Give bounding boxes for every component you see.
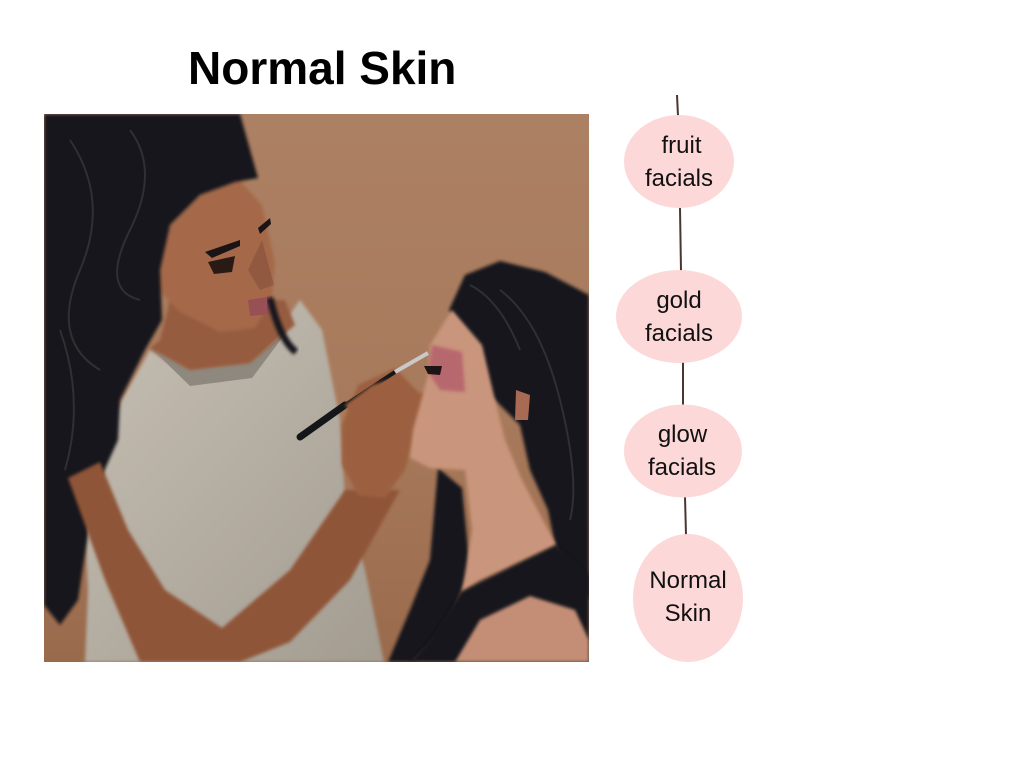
artist hair [44,114,296,625]
node: gold facials: facials [645,320,713,347]
node: Normal Skin [633,534,743,662]
makeup brush [300,353,428,437]
artist hand [340,368,424,497]
node: Normal Skin: Skin [665,600,711,627]
node: glow facials [624,404,742,498]
node: glow facials: glow [658,421,708,448]
title: Normal Skin [188,42,456,94]
artist shirt [83,300,386,662]
photo: makeup artist applying eye makeup to a client [44,114,589,662]
client hair [388,261,589,662]
node: gold facials [616,270,742,363]
flow chart: facial types [616,95,743,662]
artist face and neck [148,178,295,370]
node: gold facials: gold [656,287,702,314]
node: glow facials: facials [648,454,716,481]
artist fingers over brush [344,377,390,409]
node: fruit facials: facials [645,165,713,192]
node: fruit facials: fruit [661,132,702,159]
client face and neck [410,310,556,592]
node: fruit facials [624,115,734,208]
node: Normal Skin: Normal [649,567,727,594]
hair highlights [60,130,573,520]
connector lines [677,95,686,535]
client top [410,545,589,662]
artist arm [68,462,400,662]
